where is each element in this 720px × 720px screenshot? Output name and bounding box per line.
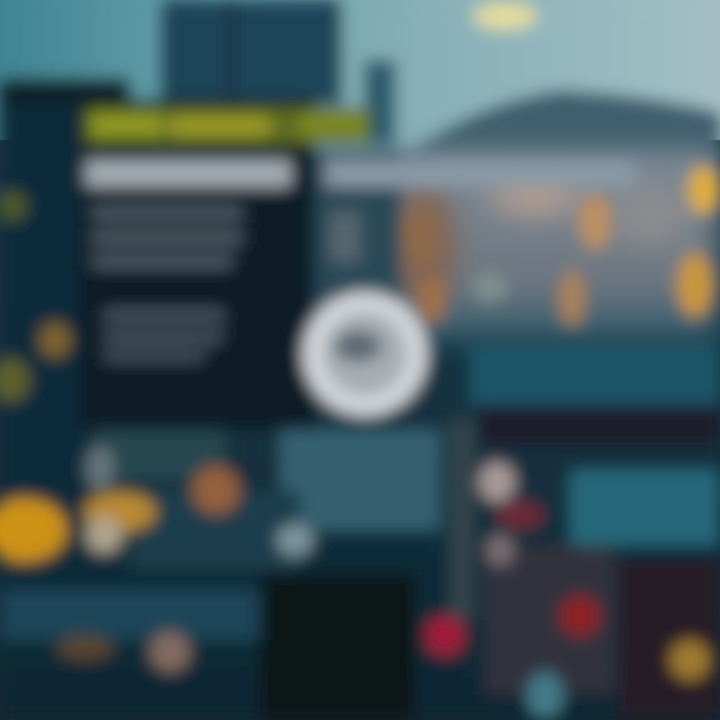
red street lights bbox=[425, 462, 600, 656]
text block 2 bbox=[104, 309, 224, 361]
icon: white circular badge bbox=[303, 292, 427, 416]
panel: dark top of left building bbox=[0, 78, 130, 106]
panel: dark left building bbox=[0, 78, 85, 508]
street and lower blocks bbox=[0, 345, 720, 720]
distant hill bbox=[405, 90, 720, 170]
left accent dots bbox=[0, 191, 71, 402]
title bar bbox=[85, 108, 370, 144]
text block 1 bbox=[92, 206, 360, 268]
tower at top bbox=[160, 0, 396, 145]
warm foreground lights bbox=[0, 446, 710, 720]
background: lower city bbox=[0, 150, 720, 720]
panel: dark text backdrop bbox=[80, 100, 315, 430]
panel: mid backdrop bbox=[315, 150, 400, 320]
orange city lights bbox=[402, 166, 720, 326]
skyline on the right bbox=[395, 150, 720, 340]
subtitle bars bbox=[86, 160, 635, 187]
background: sky bbox=[0, 0, 720, 180]
